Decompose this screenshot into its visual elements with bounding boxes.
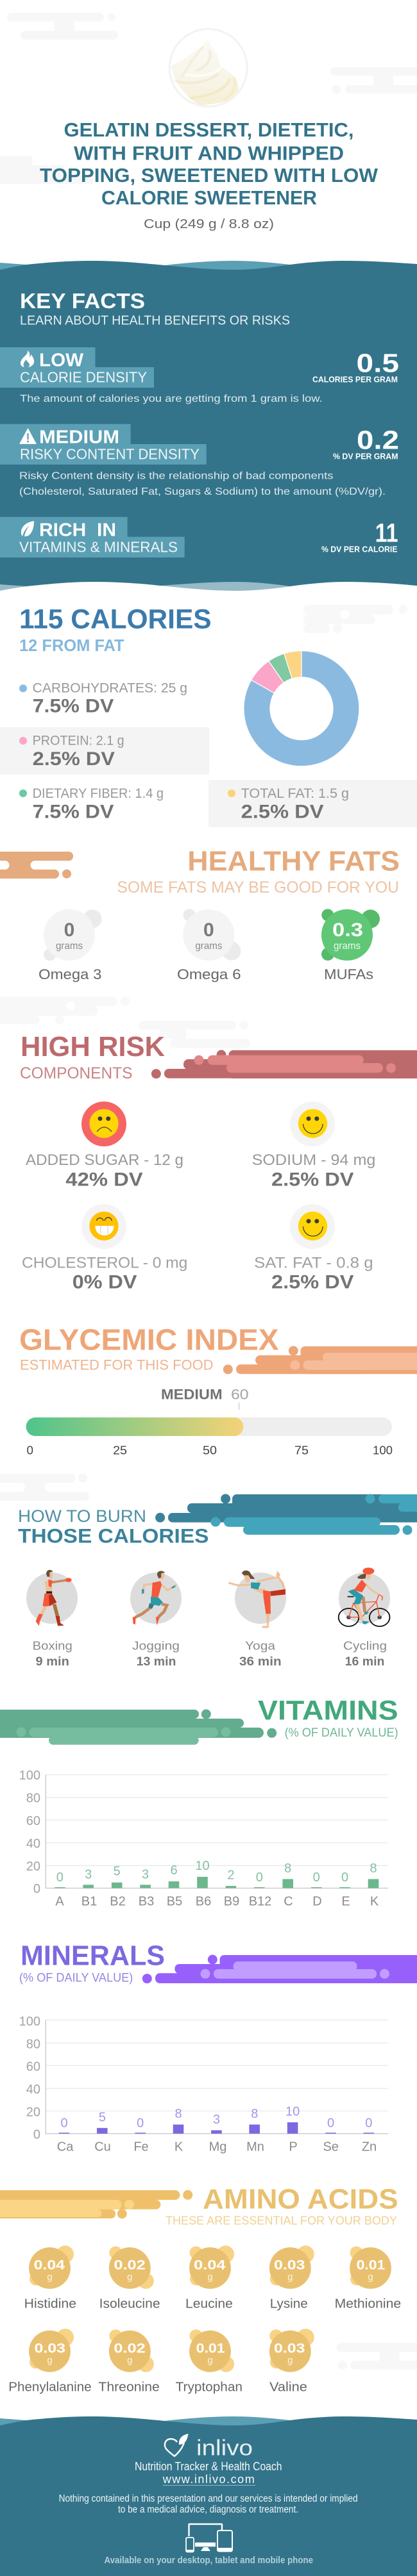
bar chart: minerals: 100 bbox=[19, 2015, 40, 2029]
icon: devices bbox=[186, 2524, 232, 2552]
legend: total fat: TOTAL FAT: 1.5 g bbox=[241, 786, 349, 801]
amino: phenylalanine: g bbox=[47, 2355, 53, 2366]
amino: methionine: 0.01 bbox=[357, 2258, 386, 2272]
activity: boxing: Boxing bbox=[33, 1640, 72, 1653]
decorative banner: orange bbox=[223, 1346, 417, 1374]
title: WITH FRUIT AND WHIPPED bbox=[74, 142, 344, 164]
fact: low calorie density: The amount of calories you are getting from 1 gram is low. bbox=[20, 393, 322, 404]
bar chart: vitamins: 0 bbox=[313, 1870, 320, 1885]
subtitle: serving size: Cup (249 g / 8.8 oz) bbox=[144, 217, 274, 231]
heading: healthy fats: HEALTHY FATS bbox=[187, 846, 400, 877]
bar chart: minerals: Zn bbox=[362, 2140, 377, 2154]
amino: lysine: Lysine bbox=[270, 2297, 308, 2311]
title: TOPPING, SWEETENED WITH LOW bbox=[40, 165, 378, 186]
fact: medium risky content density: 0.2 bbox=[357, 425, 399, 455]
heading: amino acids: AMINO ACIDS bbox=[203, 2184, 398, 2215]
risk item: cholesterol: CHOLESTEROL - 0 mg bbox=[22, 1254, 187, 1271]
bar chart: vitamins: 3 bbox=[85, 1867, 92, 1881]
stat: omega 3: 0 bbox=[64, 920, 74, 941]
bar chart: minerals: Cu bbox=[94, 2140, 111, 2154]
gauge label: medium 60: MEDIUM bbox=[161, 1386, 223, 1402]
bar chart: vitamins: B3 bbox=[139, 1894, 154, 1908]
bar chart: minerals: 0 bbox=[327, 2116, 334, 2130]
fact: low calorie density bbox=[0, 347, 399, 404]
risk item: sodium: SODIUM - 94 mg bbox=[252, 1152, 375, 1169]
amino: isoleucine: Isoleucine bbox=[99, 2297, 160, 2311]
legend: total fat bbox=[208, 780, 417, 827]
decorative banner: red bbox=[151, 1050, 417, 1078]
risk item: saturated fat: 2.5% DV bbox=[271, 1272, 353, 1293]
activity: jogging: 13 min bbox=[137, 1655, 176, 1669]
logo: inlivo bbox=[165, 2434, 253, 2461]
bar chart: vitamins: B12 bbox=[249, 1894, 271, 1908]
disclaimer bbox=[59, 2493, 358, 2515]
gauge scale labels: 50 bbox=[203, 1444, 217, 1457]
bar chart: minerals: 0 bbox=[60, 2116, 68, 2130]
activity: boxing: 9 min bbox=[36, 1655, 69, 1669]
subheading: percent of daily value: (% OF DAILY VALUE) bbox=[19, 1971, 133, 1985]
stat: omega 3 bbox=[38, 909, 101, 982]
bar chart: vitamins: 8 bbox=[284, 1862, 291, 1876]
heading: minerals: MINERALS bbox=[21, 1941, 165, 1972]
bar chart: vitamins: B6 bbox=[196, 1894, 211, 1908]
amino: phenylalanine: Phenylalanine bbox=[8, 2381, 92, 2395]
fact: low calorie density: CALORIE DENSITY bbox=[20, 369, 147, 386]
gauge scale labels: 100 bbox=[373, 1444, 393, 1457]
disclaimer: Nothing contained in this presentation and our services is intended or implied bbox=[59, 2493, 358, 2504]
legend: carbohydrates: 7.5% DV bbox=[33, 696, 114, 717]
stat: omega 3: Omega 3 bbox=[38, 966, 101, 982]
amino: leucine: g bbox=[207, 2272, 213, 2283]
bar chart: vitamins: E bbox=[341, 1894, 350, 1908]
disclaimer: to be a medical advice, diagnosis or treatment. bbox=[118, 2504, 298, 2515]
legend: carbohydrates bbox=[19, 681, 187, 717]
decorative banner: orange bbox=[0, 852, 73, 879]
stat: MUFAs: 0.3 bbox=[332, 920, 363, 941]
bar chart: vitamins: K bbox=[370, 1894, 379, 1908]
amino: phenylalanine bbox=[8, 2329, 92, 2395]
bar chart: minerals: Mg bbox=[209, 2140, 226, 2154]
risk item: cholesterol bbox=[22, 1204, 187, 1293]
heading: those calories: THOSE CALORIES bbox=[18, 1524, 209, 1548]
activity: boxing bbox=[26, 1570, 78, 1669]
panel: glycemic index bbox=[19, 1323, 417, 1457]
bar chart: minerals: 40 bbox=[26, 2083, 40, 2097]
amino: valine: 0.03 bbox=[274, 2341, 305, 2356]
fact: medium risky content density: (Cholesterol, Saturated Fat, Sugars & Sodium) to the amount (%DV/gr). bbox=[19, 486, 386, 497]
legend: carbohydrates: CARBOHYDRATES: 25 g bbox=[33, 681, 187, 696]
tagline: Nutrition Tracker & Health Coach bbox=[135, 2460, 282, 2473]
legend: total fat: 2.5% DV bbox=[241, 802, 324, 823]
bar chart: minerals: Ca bbox=[57, 2140, 74, 2154]
bar chart: minerals: 5 bbox=[99, 2110, 106, 2124]
heading: 115 calories: 115 CALORIES bbox=[19, 604, 212, 635]
bar chart: minerals: 3 bbox=[213, 2113, 220, 2127]
gauge label: medium 60: 60 bbox=[231, 1386, 249, 1402]
heading: high risk: HIGH RISK bbox=[21, 1032, 166, 1062]
bar chart: minerals: 20 bbox=[26, 2105, 40, 2119]
panel: amino acids bbox=[0, 2184, 401, 2395]
logo: inlivo: inlivo bbox=[196, 2436, 253, 2461]
icon: runner bbox=[133, 1571, 176, 1626]
amino: lysine: 0.03 bbox=[274, 2258, 305, 2272]
bar chart: vitamins: B1 bbox=[81, 1894, 97, 1908]
icon: boxer bbox=[36, 1570, 72, 1626]
bar chart: vitamins: 0 bbox=[256, 1870, 263, 1885]
panel: key facts bbox=[0, 261, 417, 599]
stat: omega 3: grams bbox=[56, 941, 83, 952]
bar chart: minerals: 8 bbox=[251, 2107, 258, 2121]
subheading: from fat: 12 FROM FAT bbox=[19, 637, 124, 655]
risk item: added sugar bbox=[26, 1102, 183, 1191]
fact: low calorie density: LOW bbox=[39, 351, 84, 371]
panel: calories bbox=[0, 604, 417, 827]
risk item: sodium bbox=[252, 1102, 375, 1191]
decorative banner: green bbox=[0, 1710, 277, 1745]
panel: high risk components bbox=[20, 1032, 417, 1293]
bar chart: vitamins: 40 bbox=[26, 1837, 40, 1851]
fact: medium risky content density: MEDIUM bbox=[39, 427, 119, 448]
bar chart: minerals bbox=[19, 2015, 388, 2154]
activity: yoga: Yoga bbox=[245, 1640, 276, 1653]
amino: isoleucine: g bbox=[127, 2272, 132, 2283]
subheading: percent of daily value: (% OF DAILY VALUE) bbox=[285, 1726, 398, 1740]
amino: methionine bbox=[335, 2247, 401, 2311]
bar chart: vitamins: 2 bbox=[227, 1869, 234, 1883]
risk item: added sugar: ADDED SUGAR - 12 g bbox=[26, 1152, 183, 1169]
bar chart: vitamins: 20 bbox=[26, 1860, 40, 1874]
gauge scale labels: 0 bbox=[27, 1444, 33, 1457]
stat: MUFAs: grams bbox=[334, 941, 361, 952]
bar chart: vitamins: 10 bbox=[195, 1859, 210, 1873]
amino: isoleucine bbox=[99, 2247, 160, 2311]
panel: minerals bbox=[19, 1941, 417, 2154]
bar chart: vitamins: 0 bbox=[56, 1870, 64, 1885]
bar chart: vitamins: 80 bbox=[26, 1792, 40, 1806]
amino: histidine: Histidine bbox=[24, 2297, 76, 2311]
availability note: Available on your desktop, tablet and mobile phone bbox=[104, 2555, 313, 2566]
panel: healthy fats bbox=[0, 846, 400, 982]
amino: histidine bbox=[24, 2245, 76, 2311]
gauge scale labels: 25 bbox=[113, 1444, 127, 1457]
fact: medium risky content density bbox=[0, 424, 399, 497]
risk item: saturated fat bbox=[254, 1204, 373, 1293]
amino: tryptophan: Tryptophan bbox=[176, 2381, 243, 2395]
fact: medium risky content density: % DV PER GRAM bbox=[333, 452, 398, 461]
amino: threonine: Threonine bbox=[98, 2381, 160, 2395]
bar chart: minerals: 8 bbox=[174, 2107, 182, 2121]
icon: leaf bbox=[21, 521, 34, 536]
bar chart: vitamins: 8 bbox=[370, 1862, 377, 1876]
icon: warning bbox=[19, 428, 37, 444]
activity: cycling: Cycling bbox=[343, 1640, 387, 1653]
amino: leucine bbox=[185, 2245, 234, 2311]
subheading: amino acids: THESE ARE ESSENTIAL FOR YOUR BODY bbox=[166, 2214, 397, 2227]
amino: threonine: 0.02 bbox=[114, 2341, 146, 2356]
bar chart: vitamins: B9 bbox=[224, 1894, 239, 1908]
title: CALORIE SWEETENER bbox=[101, 187, 317, 209]
subheading: key facts: LEARN ABOUT HEALTH BENEFITS OR RISKS bbox=[20, 314, 290, 328]
stat: omega 6: Omega 6 bbox=[177, 966, 241, 982]
bar chart: vitamins: D bbox=[312, 1894, 322, 1908]
amino: threonine: g bbox=[127, 2355, 132, 2366]
fact: rich in vitamins and minerals: % DV PER CALORIE bbox=[321, 545, 398, 554]
decorative banner: yellow bbox=[0, 2190, 192, 2218]
gauge label: medium 60 bbox=[161, 1386, 249, 1410]
bar chart: vitamins: C bbox=[284, 1894, 293, 1908]
amino: valine: g bbox=[287, 2355, 293, 2366]
amino: isoleucine: 0.02 bbox=[114, 2258, 146, 2272]
bar chart: vitamins: 0 bbox=[33, 1882, 40, 1896]
activity: yoga bbox=[229, 1571, 286, 1669]
bar chart: vitamins: A bbox=[55, 1894, 64, 1908]
amino: valine bbox=[269, 2329, 314, 2395]
risk item: added sugar: 42% DV bbox=[65, 1169, 143, 1191]
bar chart: vitamins: B5 bbox=[167, 1894, 182, 1908]
bar chart: vitamins: 100 bbox=[19, 1769, 40, 1783]
subheading: healthy fats: SOME FATS MAY BE GOOD FOR YOU bbox=[117, 879, 399, 896]
amino: tryptophan bbox=[176, 2329, 243, 2395]
amino: methionine: g bbox=[368, 2272, 373, 2283]
bar chart: vitamins: 0 bbox=[341, 1870, 348, 1885]
gauge scale labels bbox=[27, 1444, 393, 1457]
amino: tryptophan: g bbox=[207, 2355, 213, 2366]
amino: lysine bbox=[269, 2245, 314, 2311]
legend: dietary fiber: DIETARY FIBER: 1.4 g bbox=[33, 786, 164, 801]
stat: omega 6: grams bbox=[195, 941, 222, 952]
activity: cycling: 16 min bbox=[345, 1655, 385, 1669]
title bbox=[40, 119, 378, 209]
legend: dietary fiber bbox=[19, 786, 164, 823]
panel: vitamins bbox=[0, 1695, 398, 1908]
bar chart: minerals: Fe bbox=[133, 2140, 149, 2154]
title: GELATIN DESSERT, DIETETIC, bbox=[64, 119, 354, 141]
legend: protein: PROTEIN: 2.1 g bbox=[33, 734, 124, 748]
risk item: cholesterol: 0% DV bbox=[72, 1272, 137, 1293]
fact: rich in vitamins and minerals: 11 bbox=[375, 518, 398, 548]
gauge: glycemic index bar bbox=[26, 1417, 392, 1436]
fact: low calorie density: CALORIES PER GRAM bbox=[312, 376, 398, 384]
activity: jogging bbox=[130, 1571, 182, 1669]
heading: vitamins: VITAMINS bbox=[258, 1695, 398, 1726]
bar chart: minerals: 80 bbox=[26, 2037, 40, 2051]
bar chart: minerals: K bbox=[174, 2140, 183, 2154]
fact: low calorie density: 0.5 bbox=[357, 349, 399, 378]
amino: threonine bbox=[98, 2329, 160, 2395]
gauge scale labels: 75 bbox=[294, 1444, 309, 1457]
bar chart: vitamins: 6 bbox=[170, 1863, 178, 1878]
decorative banner: purple bbox=[142, 1954, 417, 1983]
icon: yoga pose bbox=[229, 1571, 285, 1628]
panel: how to burn those calories bbox=[18, 1494, 417, 1669]
amino: leucine: 0.04 bbox=[194, 2258, 226, 2272]
bar chart: vitamins: 5 bbox=[114, 1865, 121, 1879]
bar chart: minerals: Se bbox=[323, 2140, 339, 2154]
decorative banner: teal bbox=[155, 1494, 417, 1535]
donut chart: calorie sources bbox=[244, 651, 359, 766]
bar chart: minerals: P bbox=[289, 2140, 298, 2154]
stat: MUFAs bbox=[321, 909, 380, 982]
activity: cycling bbox=[339, 1567, 390, 1669]
amino: histidine: g bbox=[47, 2272, 53, 2283]
bar chart: minerals: Mn bbox=[246, 2140, 264, 2154]
bar chart: minerals: 0 bbox=[365, 2116, 372, 2130]
fact: rich in vitamins and minerals bbox=[0, 517, 398, 557]
bar chart: vitamins: B2 bbox=[110, 1894, 126, 1908]
legend: protein bbox=[0, 727, 209, 775]
link: website: www.inlivo.com bbox=[162, 2473, 255, 2486]
stat: omega 6 bbox=[177, 909, 241, 982]
stat: omega 6: 0 bbox=[203, 920, 214, 941]
icon: cyclist bbox=[339, 1567, 389, 1626]
bar chart: minerals: 0 bbox=[33, 2128, 40, 2142]
amino: histidine: 0.04 bbox=[34, 2258, 65, 2272]
heading: glycemic index: GLYCEMIC INDEX bbox=[19, 1323, 279, 1357]
stat: MUFAs: MUFAs bbox=[324, 966, 373, 982]
subheading: components: COMPONENTS bbox=[20, 1064, 132, 1082]
activity: jogging: Jogging bbox=[132, 1640, 180, 1653]
risk item: saturated fat: SAT. FAT - 0.8 g bbox=[254, 1254, 373, 1271]
bar chart: vitamins: 60 bbox=[26, 1814, 40, 1828]
bar chart: vitamins bbox=[19, 1769, 388, 1908]
amino: phenylalanine: 0.03 bbox=[35, 2341, 65, 2356]
amino: methionine: Methionine bbox=[335, 2297, 401, 2311]
fact: rich in vitamins and minerals: RICH IN bbox=[39, 520, 116, 541]
fact: medium risky content density: RISKY CONTENT DENSITY bbox=[20, 446, 200, 463]
subheading: glycemic index: ESTIMATED FOR THIS FOOD bbox=[20, 1357, 213, 1373]
amino: leucine: Leucine bbox=[185, 2297, 233, 2311]
bar chart: vitamins: 3 bbox=[142, 1867, 149, 1881]
legend: protein: 2.5% DV bbox=[33, 748, 115, 770]
activity: yoga: 36 min bbox=[239, 1655, 282, 1669]
panel: footer bbox=[0, 2416, 417, 2576]
fact: rich in vitamins and minerals: VITAMINS & MINERALS bbox=[19, 539, 178, 556]
bar chart: minerals: 0 bbox=[137, 2116, 144, 2130]
icon: flame bbox=[21, 351, 34, 367]
heading: how to burn: HOW TO BURN bbox=[18, 1507, 146, 1526]
bar chart: minerals: 60 bbox=[26, 2060, 40, 2074]
bar chart: minerals: 10 bbox=[285, 2105, 300, 2119]
heading: key facts: KEY FACTS bbox=[20, 289, 145, 313]
legend: dietary fiber: 7.5% DV bbox=[33, 802, 114, 823]
amino: lysine: g bbox=[287, 2272, 293, 2283]
amino: valine: Valine bbox=[269, 2381, 307, 2395]
icon: whipped topping photo bbox=[169, 29, 247, 106]
fact: medium risky content density: Risky Content density is the relationship of bad components bbox=[19, 470, 334, 481]
amino: tryptophan: 0.01 bbox=[196, 2341, 225, 2356]
risk item: sodium: 2.5% DV bbox=[271, 1169, 353, 1191]
